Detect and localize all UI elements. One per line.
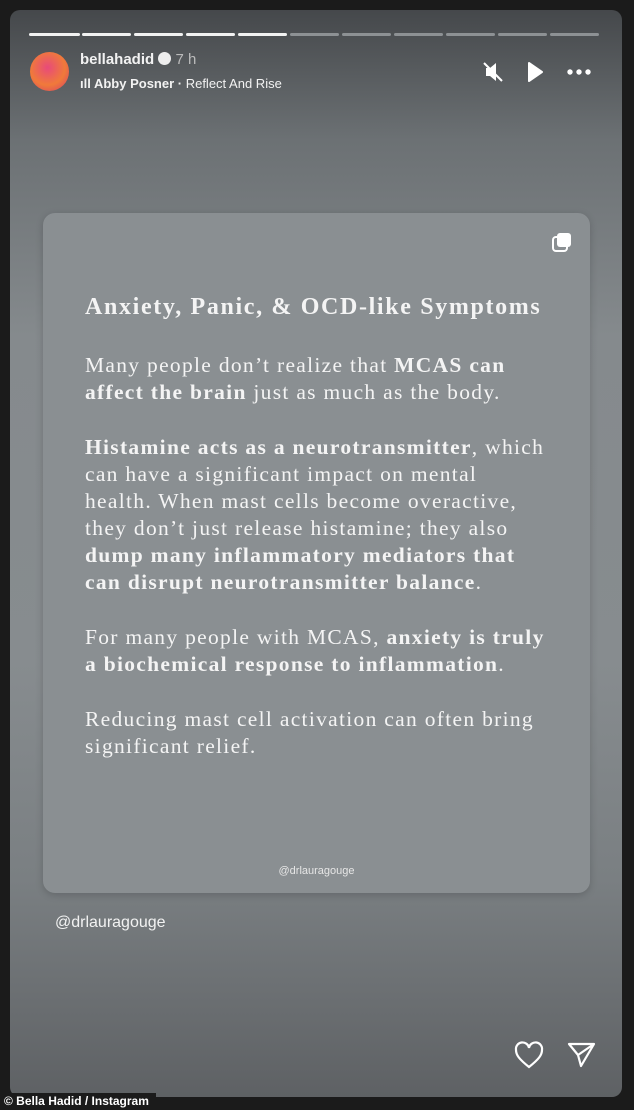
progress bars	[29, 33, 599, 36]
avatar	[30, 52, 69, 91]
inner card	[43, 213, 590, 893]
music line: ıll Abby Posner · Reflect And Rise	[80, 76, 282, 91]
paragraph 3: For many people with MCAS, anxiety is truly	[85, 625, 545, 649]
paragraph 2: they don’t just release histamine; they also	[85, 516, 508, 540]
paragraph 2: dump many inflammatory mediators that	[85, 543, 515, 567]
paragraph 2: can have a significant impact on mental	[85, 462, 477, 486]
icons: heart and send	[514, 1041, 596, 1068]
paragraph 2: Histamine acts as a neurotransmitter, which	[85, 435, 544, 459]
title: Anxiety, Panic, & OCD-like Symptoms	[85, 294, 541, 320]
paragraph 4: Reducing mast cell activation can often bring	[85, 707, 534, 731]
paragraph 4	[85, 707, 534, 758]
paragraph 1	[85, 353, 505, 404]
paragraph 2: health. When mast cells become overactive,	[85, 489, 517, 513]
card handle: @drlauragouge	[278, 865, 354, 877]
paragraph 1: Many people don’t realize that MCAS can	[85, 353, 505, 377]
icons top right	[483, 62, 591, 82]
icon: copy	[552, 233, 571, 252]
caption handle: @drlauragouge	[55, 914, 166, 931]
paragraph 2	[85, 435, 544, 594]
paragraph 3	[85, 625, 545, 676]
paragraph 2: can disrupt neurotransmitter balance.	[85, 570, 482, 594]
username: bellahadid 7 h	[80, 51, 196, 68]
credit: © Bella Hadid / Instagram	[4, 1094, 149, 1108]
paragraph 4: significant relief.	[85, 734, 257, 758]
paragraph 1: affect the brain just as much as the body.	[85, 380, 501, 404]
paragraph 3: a biochemical response to inflammation.	[85, 652, 505, 676]
